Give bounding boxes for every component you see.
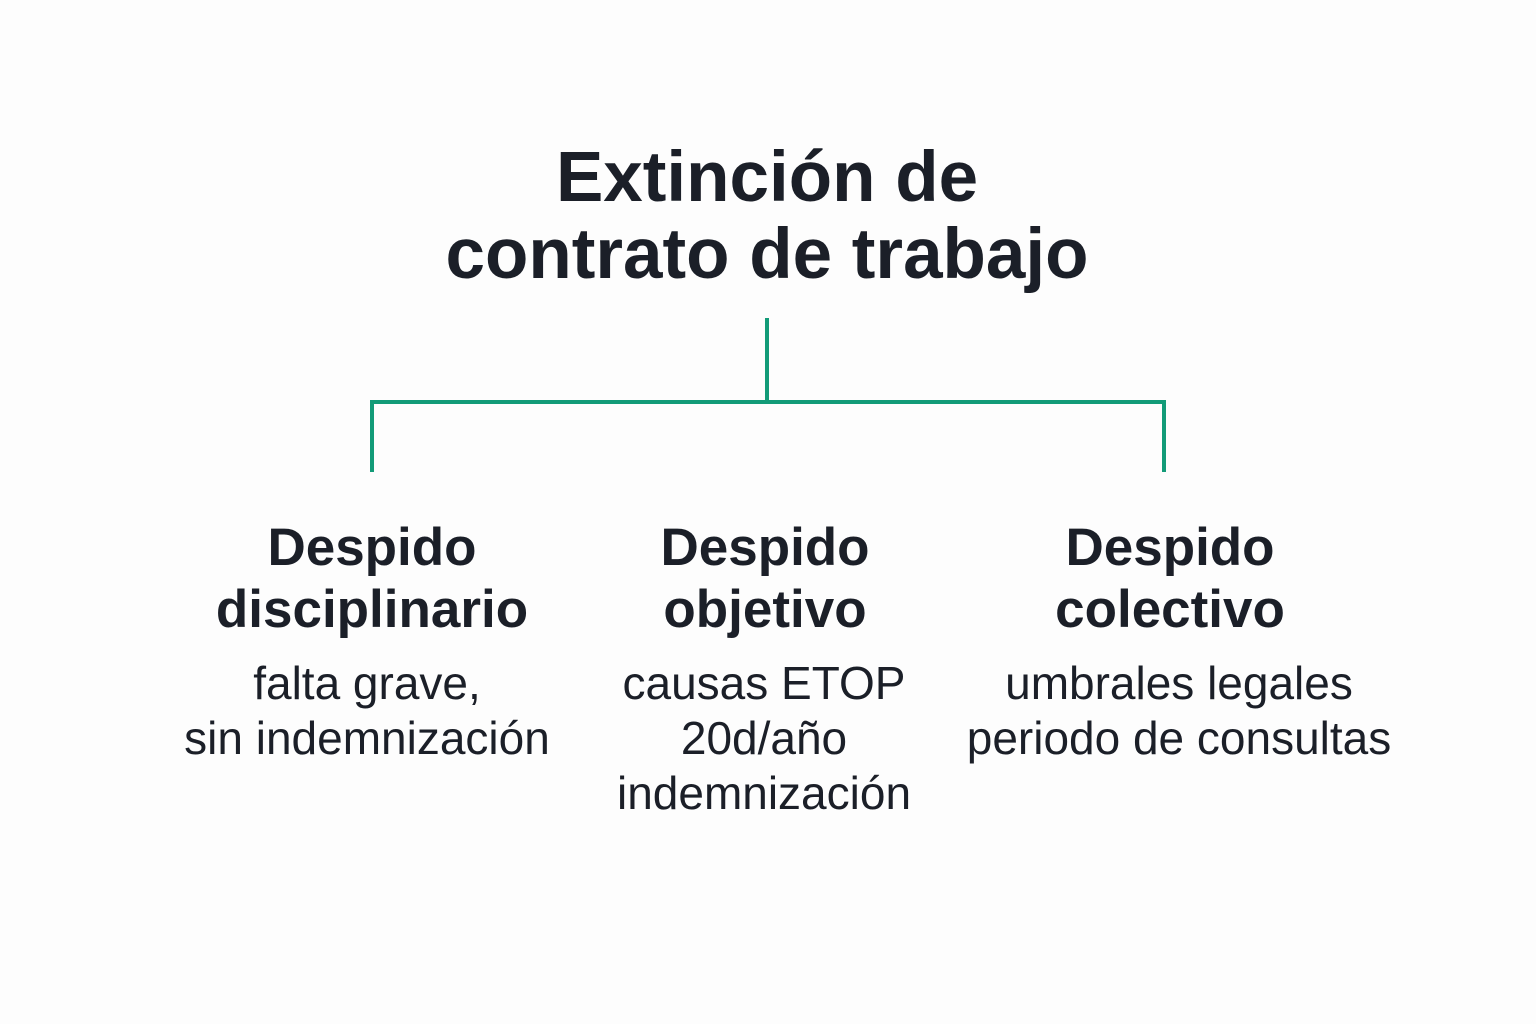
text: objetivo detail: 20d/año bbox=[681, 712, 847, 764]
text: objetivo detail bbox=[617, 657, 911, 819]
heading: despido colectivo bbox=[1055, 518, 1285, 639]
text: disciplinario detail: sin indemnización bbox=[184, 712, 550, 764]
text: colectivo detail bbox=[967, 657, 1391, 764]
text: objetivo detail: indemnización bbox=[617, 767, 911, 819]
heading: despido disciplinario bbox=[216, 518, 528, 639]
title bbox=[445, 138, 1089, 294]
heading: despido objetivo: objetivo bbox=[663, 580, 867, 639]
title: Extinción de bbox=[556, 138, 978, 217]
text: disciplinario detail: falta grave, bbox=[253, 657, 481, 709]
heading: despido colectivo: colectivo bbox=[1055, 580, 1285, 639]
heading: despido colectivo: Despido bbox=[1065, 518, 1275, 577]
title: contrato de trabajo bbox=[445, 215, 1089, 294]
heading: despido disciplinario: disciplinario bbox=[216, 580, 528, 639]
heading: despido objetivo: Despido bbox=[660, 518, 870, 577]
text: objetivo detail: causas ETOP bbox=[623, 657, 905, 709]
text: disciplinario detail bbox=[184, 657, 550, 764]
heading: despido objetivo bbox=[660, 518, 870, 639]
heading: despido disciplinario: Despido bbox=[267, 518, 477, 577]
text: colectivo detail: umbrales legales bbox=[1005, 657, 1353, 709]
text: colectivo detail: periodo de consultas bbox=[967, 712, 1391, 764]
